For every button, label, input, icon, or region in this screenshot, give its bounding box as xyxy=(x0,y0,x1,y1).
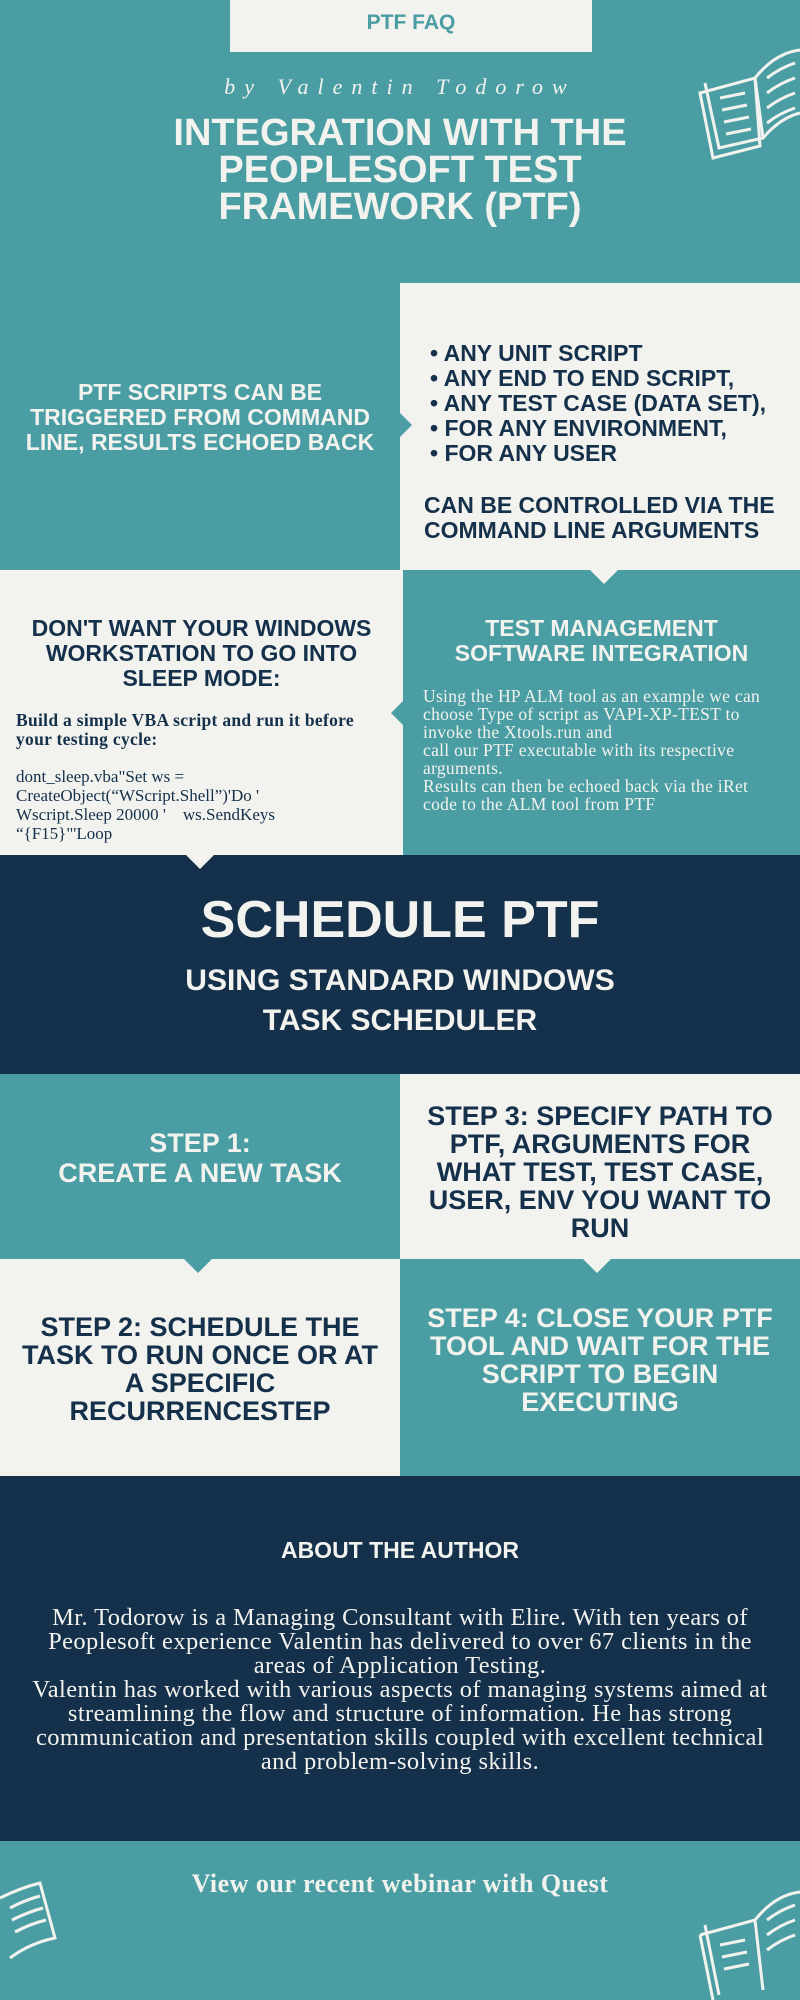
body: about: communication and presentation skills coupled with excellent technical xyxy=(36,1724,764,1751)
title: PEOPLESOFT TEST xyxy=(218,149,582,191)
bullets xyxy=(430,340,766,466)
subheading: TASK SCHEDULER xyxy=(263,1004,537,1037)
arrow: step3 down xyxy=(583,1259,611,1273)
step 3: STEP 3: SPECIFY PATH TO PTF, ARGUMENTS FOR WHAT TEST, TEST CASE, USER, ENV YOU WANT TO RUN xyxy=(427,1101,773,1243)
panel: schedule xyxy=(0,855,800,1074)
subheading xyxy=(185,964,615,1037)
body: alm: Using the HP ALM tool as an example we can xyxy=(423,686,760,706)
text: build: your testing cycle: xyxy=(16,729,157,749)
heading: sleep: SLEEP MODE: xyxy=(122,665,281,691)
heading: test mgmt: SOFTWARE INTEGRATION xyxy=(455,640,748,666)
arrow: down into dark xyxy=(186,855,214,869)
heading: test mgmt: TEST MANAGEMENT xyxy=(485,615,718,641)
icon: book bottom right xyxy=(698,1890,800,2000)
heading: sleep: WORKSTATION TO GO INTO xyxy=(46,640,357,666)
text: triggered: TRIGGERED FROM COMMAND xyxy=(30,404,370,430)
arrow: step1 down xyxy=(184,1259,212,1273)
heading: schedule: SCHEDULE PTF xyxy=(201,891,599,949)
body: about: Peoplesoft experience Valentin has delivered to over 67 clients in the xyxy=(48,1628,752,1655)
heading: test mgmt xyxy=(455,615,748,666)
step 1: CREATE A NEW TASK xyxy=(58,1158,342,1188)
heading: sleep xyxy=(32,615,371,691)
bullets: • ANY END TO END SCRIPT, xyxy=(430,365,734,391)
heading: about: ABOUT THE AUTHOR xyxy=(281,1537,519,1563)
code: dont_sleep.vba"Set ws = xyxy=(16,767,184,786)
body: alm xyxy=(423,686,760,814)
step 3 xyxy=(400,1074,800,1259)
title xyxy=(173,112,627,228)
step 1: STEP 1: xyxy=(149,1128,251,1158)
body: about: areas of Application Testing. xyxy=(254,1652,546,1679)
text: build: Build a simple VBA script and run it before xyxy=(16,710,354,730)
step 2 xyxy=(0,1259,400,1476)
body: alm: code to the ALM tool from PTF xyxy=(423,794,655,814)
bullets: • FOR ANY USER xyxy=(430,440,617,466)
controlled text xyxy=(424,492,775,543)
body: alm: invoke the Xtools.run and xyxy=(423,722,612,742)
bullets: • ANY UNIT SCRIPT xyxy=(430,340,643,366)
byline: by Valentin Todorow xyxy=(224,74,576,99)
title: INTEGRATION WITH THE xyxy=(173,112,627,154)
text: triggered: PTF SCRIPTS CAN BE xyxy=(78,379,322,405)
body: about: Mr. Todorow is a Managing Consultant with Elire. With ten years of xyxy=(52,1604,748,1631)
subheading: USING STANDARD WINDOWS xyxy=(185,964,615,997)
icon: book bottom left xyxy=(0,1881,57,1960)
controlled text: COMMAND LINE ARGUMENTS xyxy=(424,517,759,543)
body: alm: arguments. xyxy=(423,758,503,778)
header label: PTF FAQ xyxy=(367,11,455,34)
text: build xyxy=(16,710,354,749)
panel: about author xyxy=(0,1476,800,1841)
body: about: and problem-solving skills. xyxy=(261,1748,539,1775)
code xyxy=(16,767,275,843)
code: CreateObject(“WScript.Shell”)'Do ' xyxy=(16,786,259,805)
panel: sleep mode xyxy=(0,570,403,855)
body: about xyxy=(32,1604,768,1775)
arrow: left notch xyxy=(391,701,403,725)
panel: test management xyxy=(403,570,800,855)
bullets: • ANY TEST CASE (DATA SET), xyxy=(430,390,766,416)
body: alm: Results can then be echoed back via the iRet xyxy=(423,776,748,796)
arrow: right notch xyxy=(400,413,412,437)
code: “{F15}"'Loop xyxy=(16,824,112,843)
text: triggered: LINE, RESULTS ECHOED BACK xyxy=(26,429,374,455)
step 1 xyxy=(0,1074,400,1259)
panel: command line left xyxy=(0,283,400,570)
title: FRAMEWORK (PTF) xyxy=(218,186,582,228)
body: about: streamlining the flow and structure of information. He has strong xyxy=(68,1700,732,1727)
panel: command line right xyxy=(400,283,800,570)
heading: sleep: DON'T WANT YOUR WINDOWS xyxy=(32,615,371,641)
step 4 xyxy=(400,1259,800,1476)
bullets: • FOR ANY ENVIRONMENT, xyxy=(430,415,727,441)
body: alm: call our PTF executable with its respective xyxy=(423,740,734,760)
controlled text: CAN BE CONTROLLED VIA THE xyxy=(424,492,775,518)
text: triggered xyxy=(26,379,374,455)
header box xyxy=(230,0,592,52)
body: alm: choose Type of script as VAPI-XP-TEST to xyxy=(423,704,740,724)
step 2: STEP 2: SCHEDULE THE TASK TO RUN ONCE OR AT A SPECIFIC RECURRENCESTEP xyxy=(22,1312,378,1426)
footer link: View our recent webinar with Quest xyxy=(192,1869,608,1898)
step 4: STEP 4: CLOSE YOUR PTF TOOL AND WAIT FOR THE SCRIPT TO BEGIN EXECUTING xyxy=(427,1303,773,1417)
body: about: Valentin has worked with various aspects of managing systems aimed at xyxy=(32,1676,768,1703)
code: Wscript.Sleep 20000 ' ws.SendKeys xyxy=(16,805,275,824)
icon: open book top right xyxy=(698,48,800,160)
arrow: down from light xyxy=(590,570,618,584)
